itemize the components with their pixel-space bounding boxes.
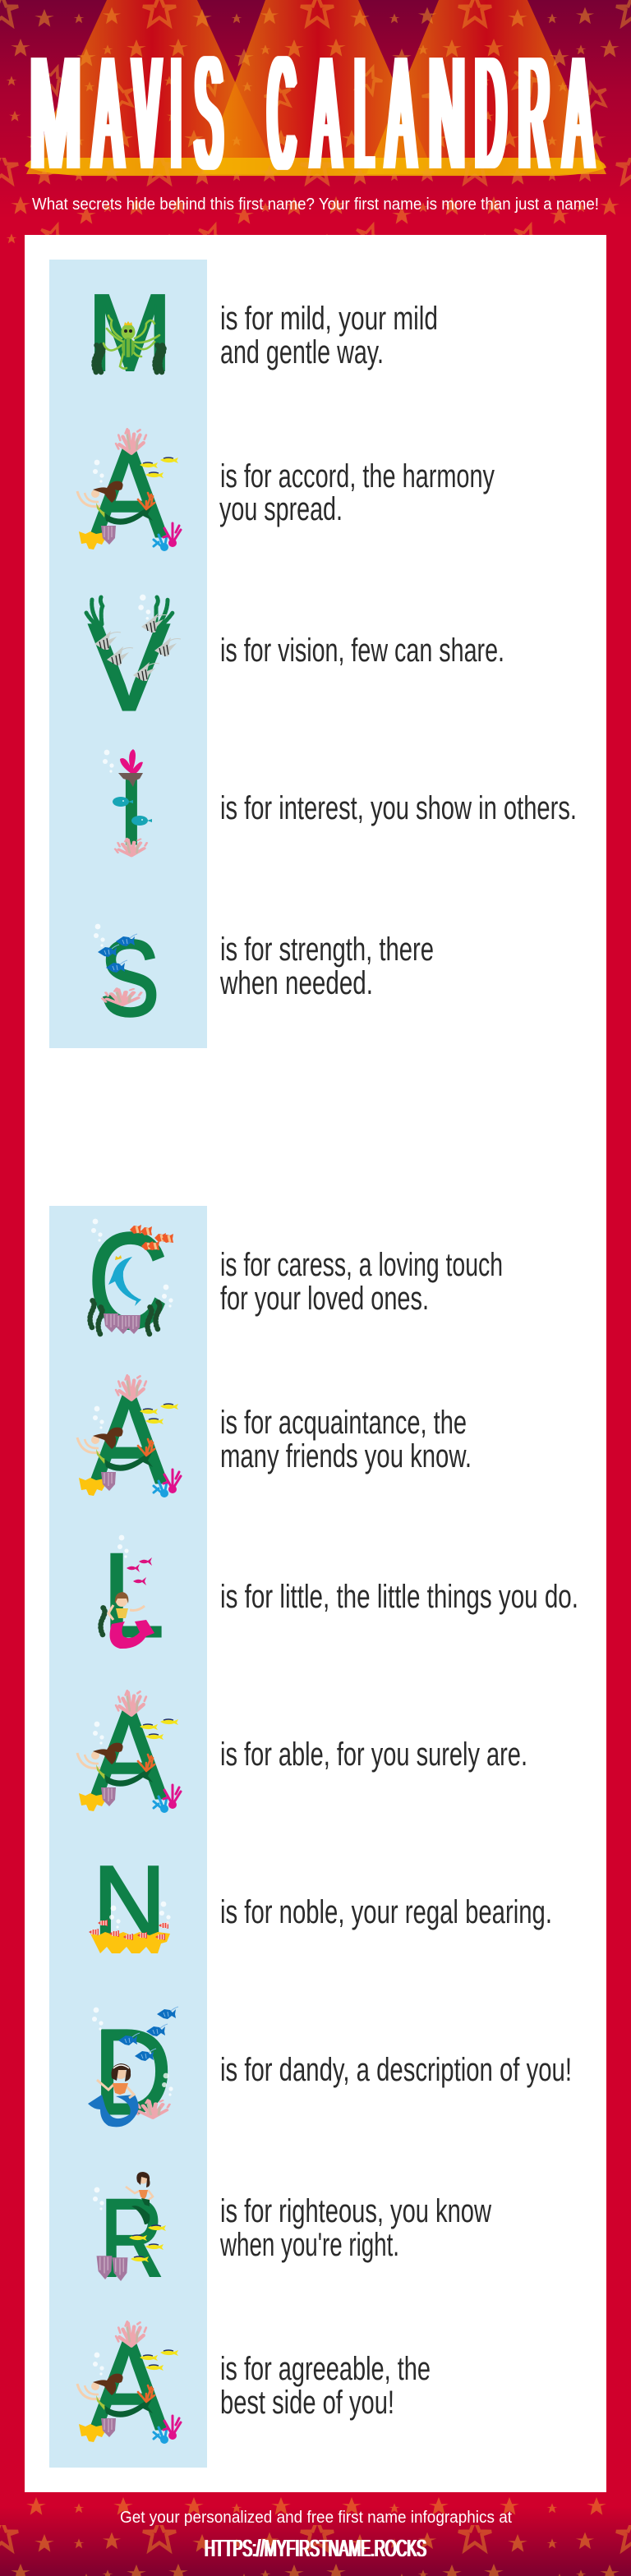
text: M: is for mild, your mild	[220, 301, 438, 337]
letter M: M	[87, 273, 173, 393]
row: N	[89, 1846, 552, 1960]
row: D	[88, 2004, 572, 2140]
title: S	[196, 23, 222, 203]
row: A	[77, 1370, 472, 1510]
letter V: V	[89, 600, 169, 736]
letter I: I	[118, 757, 145, 865]
title: N	[429, 23, 465, 203]
icon: mermaid, fish and coral	[93, 2172, 166, 2281]
title: A	[312, 23, 340, 203]
icon: octopus and seaweed	[94, 315, 164, 372]
title: D	[476, 23, 505, 203]
text: C second line: for your loved ones.	[220, 1281, 429, 1317]
stars: bottom	[0, 2494, 631, 2576]
row: C	[88, 1204, 503, 1356]
title: C	[269, 23, 295, 203]
spotlights	[25, 0, 606, 176]
icon: seaweed and angelfish	[86, 595, 181, 681]
row: M	[87, 273, 438, 393]
title: L	[356, 23, 372, 203]
letter N: N	[93, 1846, 166, 1960]
icon: mermaid and corals	[77, 1375, 181, 1497]
row: A	[77, 1686, 527, 1825]
text: A: is for accord, the harmony	[220, 458, 495, 494]
letter S: S	[100, 918, 159, 1038]
row: L	[100, 1528, 578, 1662]
footer URL: HTTPS://MYFIRSTNAME.ROCKS	[205, 2536, 426, 2562]
title: A	[387, 23, 415, 203]
text: A: is for acquaintance, the	[220, 1405, 467, 1441]
text: R: is for righteous, you know	[220, 2193, 491, 2229]
icon: pink mermaid and fish	[100, 1535, 154, 1649]
row: S	[94, 918, 434, 1038]
icon: mermaid and corals	[77, 429, 181, 551]
text: R second line: when you're right.	[219, 2227, 399, 2263]
title	[30, 23, 592, 203]
row: R	[93, 2172, 491, 2299]
panel: MAVIS letter column	[49, 260, 207, 1048]
letter L: L	[103, 1528, 164, 1662]
subtitle: What secrets hide behind this first name? Your first name is more than just a name!	[32, 196, 599, 214]
letter D: D	[94, 2004, 172, 2140]
text: S: is for strength, there	[220, 932, 434, 968]
icon: mermaid and corals	[77, 2321, 181, 2444]
text: A second line: best side of you!	[220, 2385, 394, 2421]
letter R: R	[100, 2176, 164, 2299]
row: A	[77, 2316, 431, 2456]
row: V	[86, 595, 504, 736]
icon: dolphin, fish, seaweed and coral	[90, 1219, 173, 1334]
text: C: is for caress, a loving touch	[220, 1247, 503, 1283]
letter A: A	[90, 1686, 168, 1825]
text: A second line: many friends you know.	[220, 1438, 472, 1474]
row: A	[77, 424, 495, 564]
text: V: is for vision, few can share.	[220, 632, 504, 669]
letter A: A	[90, 1370, 168, 1510]
text: S second line: when needed.	[219, 965, 373, 1001]
icon: mermaid and corals	[77, 1690, 181, 1813]
panel: CALANDRA letter column	[49, 1206, 207, 2468]
letter A: A	[90, 424, 168, 564]
footer text: Get your personalized and free first name infographics at	[120, 2509, 512, 2527]
row: I	[103, 749, 577, 865]
letter C: C	[88, 1204, 168, 1356]
text: A: is for agreeable, the	[220, 2351, 431, 2387]
text: M second line: and gentle way.	[220, 334, 384, 370]
icon: blue fish and coral	[94, 924, 141, 1005]
title: M	[30, 23, 81, 203]
title: A	[94, 23, 122, 203]
stars: top	[0, 0, 631, 246]
title: I	[173, 23, 180, 203]
letter A: A	[90, 2316, 168, 2456]
icon: clownfish and yellow coral	[89, 1902, 171, 1953]
title: V	[134, 23, 159, 203]
text: A second line: you spread.	[219, 491, 343, 527]
icon: blue mermaid, fish and coral	[88, 2007, 178, 2127]
icon: anemone, fish and coral	[103, 749, 152, 856]
